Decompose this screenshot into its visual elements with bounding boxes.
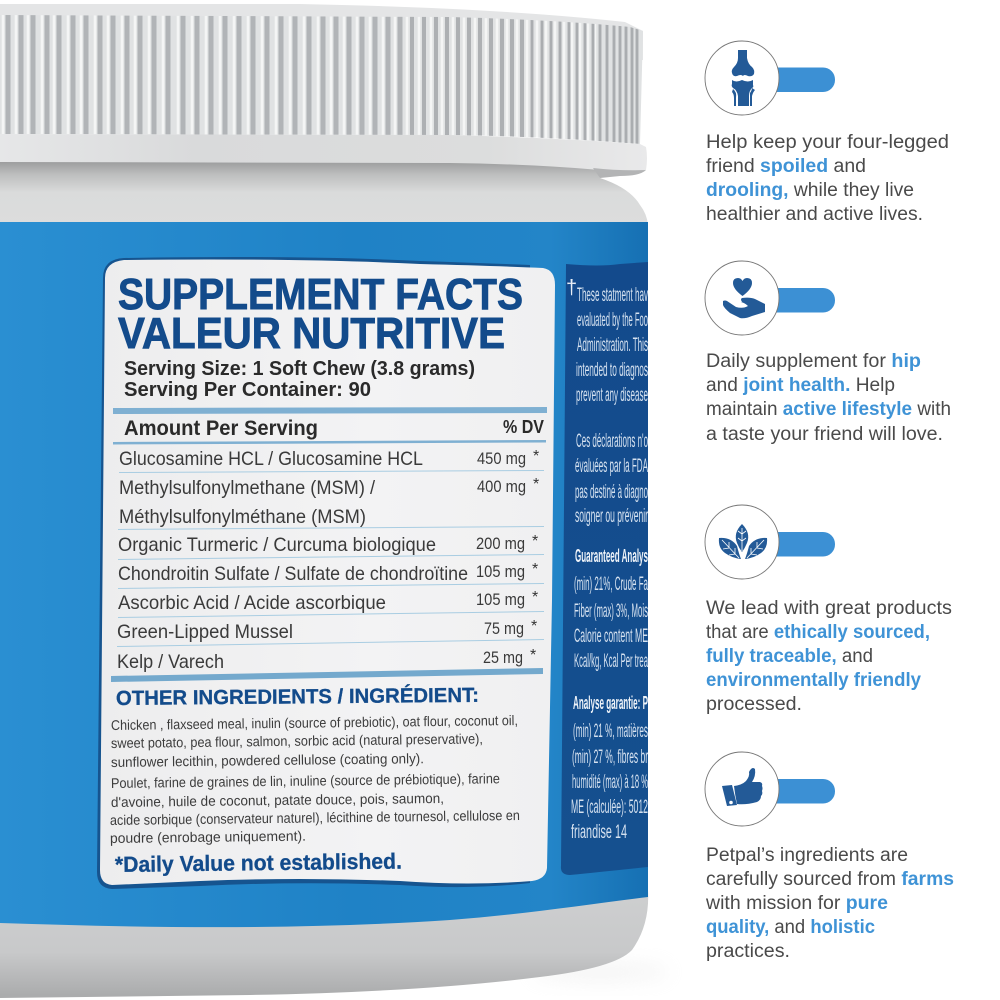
text 4: quality, and holistic — [706, 917, 875, 938]
jar neck and shoulder — [0, 160, 648, 225]
other ingredients text: poudre (enrobage uniquement). — [110, 828, 306, 846]
product jar: soigner ou prévenir — [575, 506, 648, 527]
other ingredients text: Poulet, farine de graines de lin, inuline (source de prébiotique), farine — [111, 770, 500, 791]
label dark edge — [97, 257, 530, 889]
text 2: and joint health. Help — [706, 375, 895, 396]
benefit 4 — [705, 752, 954, 962]
jar lid top — [0, 4, 643, 60]
jar blue wrap — [0, 222, 648, 927]
text 1: drooling, while they live — [706, 180, 914, 201]
ingredient rows: Organic Turmeric / Curcuma biologique — [118, 534, 436, 556]
product jar: (min) 21%, Crude Fa — [574, 574, 648, 595]
other ingredients text: Chicken , flaxseed meal, inulin (source of prebiotic), oat flour, coconut oil, — [111, 712, 518, 733]
ingredient rows: 25 mg — [483, 649, 523, 667]
ingredient rows: 400 mg — [477, 478, 526, 496]
other ingredients text: sweet potato, pea flour, salmon, sorbic acid (natural preservative), — [111, 730, 483, 751]
ingredient rows: Chondroitin Sulfate / Sulfate de chondroïtine — [118, 563, 468, 585]
ingredient rows: * — [531, 618, 537, 635]
other ingredients text: acide sorbique (conservateur naturel), lécithine de tournesol, cellulose en — [110, 807, 520, 828]
product jar: pas destiné à diagno — [575, 482, 648, 503]
lid rim — [0, 134, 647, 172]
supplement facts label — [97, 257, 555, 889]
other ingredients text: d'avoine, huile de coconut, patate douce, pois, saumon, — [111, 790, 444, 810]
serving info: Serving Per Container: 90 — [124, 379, 371, 401]
text 1: friend spoiled and — [706, 156, 866, 177]
panel text: friandise 14 — [571, 822, 627, 843]
product jar: Guaranteed Analys — [575, 545, 648, 566]
product jar: évaluées par la FDA — [575, 456, 648, 477]
other ingredients heading: OTHER INGREDIENTS / INGRÉDIENT: — [116, 684, 479, 710]
ingredient rows: * — [533, 448, 539, 465]
ingredient rows: 200 mg — [476, 535, 525, 553]
text 3: environmentally friendly — [706, 670, 921, 691]
text 3: that are ethically sourced, — [706, 622, 930, 643]
product jar: prevent any disease — [576, 385, 648, 406]
benefit 2 — [705, 261, 951, 445]
text 2: a taste your friend will love. — [706, 424, 943, 445]
text 3 — [706, 598, 952, 715]
product jar: (min) 21 %, matières — [573, 721, 648, 742]
icon: leaves — [705, 505, 779, 579]
ingredient rows: Methylsulfonylmethane (MSM) / — [119, 477, 376, 499]
product jar: Administration. This — [577, 335, 648, 356]
benefit 1 — [705, 41, 949, 225]
product jar: Calorie content ME — [574, 626, 648, 647]
ingredient rows: 105 mg — [476, 591, 525, 609]
label white face — [100, 260, 555, 885]
serving info: Serving Size: 1 Soft Chew (3.8 grams) — [124, 358, 475, 380]
ingredient rows: * — [532, 533, 538, 550]
ingredient rows — [117, 448, 539, 673]
dagger mark: † — [566, 277, 577, 299]
ingredient rows: * — [532, 589, 538, 606]
product jar: intended to diagnos — [576, 360, 648, 381]
other ingredients text: sunflower lecithin, powdered cellulose (coating only). — [111, 750, 424, 770]
daily value note: *Daily Value not established. — [115, 848, 402, 877]
product jar — [0, 0, 670, 998]
pill 4 — [742, 779, 835, 804]
ingredient rows: Kelp / Varech — [117, 651, 224, 673]
product jar: (min) 27 %, fibres br — [572, 747, 648, 768]
text 2 — [706, 351, 951, 445]
benefit 3 — [705, 505, 952, 715]
pill 1 — [742, 68, 835, 92]
label title — [118, 270, 523, 358]
pill 3 — [742, 532, 835, 556]
serving info — [124, 358, 475, 401]
label title: SUPPLEMENT FACTS — [118, 270, 523, 319]
jar base — [0, 890, 648, 998]
product jar: Fiber (max) 3%, Mois — [574, 601, 648, 622]
icon: thumbs up — [705, 752, 779, 826]
jar ground shadow — [530, 964, 670, 980]
ingredient rows: 450 mg — [477, 450, 526, 468]
other ingredients text — [110, 712, 520, 846]
product jar: Ces déclarations n'o — [576, 431, 648, 452]
icon: knee joint — [705, 41, 779, 115]
text 2: Daily supplement for hip — [706, 351, 921, 372]
product jar: Kcal/kg, Kcal Per trea — [574, 651, 648, 672]
text 1: healthier and active lives. — [706, 204, 923, 225]
text 4: carefully sourced from farms — [706, 869, 954, 890]
pill 2 — [742, 288, 835, 312]
table rules — [111, 407, 547, 682]
ingredient rows: Ascorbic Acid / Acide ascorbique — [118, 592, 386, 614]
icon: heart in hand — [705, 261, 779, 335]
table header: Amount Per Serving — [124, 416, 318, 440]
product jar: ME (calculée): 5012 — [571, 797, 648, 818]
table header dv: % DV — [503, 416, 545, 437]
text 3: fully traceable, and — [706, 646, 873, 667]
text 3: We lead with great products — [706, 598, 952, 619]
ingredient rows: * — [530, 647, 536, 664]
ingredient rows: Green-Lipped Mussel — [117, 621, 293, 643]
ingredient rows: 75 mg — [484, 620, 524, 638]
label title: VALEUR NUTRITIVE — [118, 309, 505, 358]
ingredient rows: * — [533, 476, 539, 493]
text 4 — [705, 845, 954, 962]
product jar: evaluated by the Foo — [577, 310, 648, 331]
product jar: humidité (max) à 18 % — [572, 772, 648, 793]
text 4: Petpal’s ingredients are — [706, 845, 908, 866]
text 1 — [706, 132, 949, 225]
product jar: Analyse garantie: P — [573, 692, 648, 713]
side panel — [561, 262, 648, 875]
ingredient rows: Méthylsulfonylméthane (MSM) — [119, 506, 366, 528]
text 4: with mission for pure — [705, 893, 888, 914]
rim underside shadow — [593, 168, 646, 178]
ingredient rows: Glucosamine HCL / Glucosamine HCL — [119, 448, 423, 470]
text 3: processed. — [706, 694, 802, 715]
text 4: practices. — [706, 941, 790, 962]
ingredient rows: 105 mg — [476, 563, 525, 581]
panel background — [561, 262, 648, 875]
product jar: These statment hav — [577, 285, 648, 306]
panel text — [571, 285, 648, 843]
lid ridges — [0, 15, 642, 144]
ingredient rows: * — [532, 561, 538, 578]
text 2: maintain active lifestyle with — [706, 399, 951, 420]
text 1: Help keep your four-legged — [706, 132, 949, 153]
